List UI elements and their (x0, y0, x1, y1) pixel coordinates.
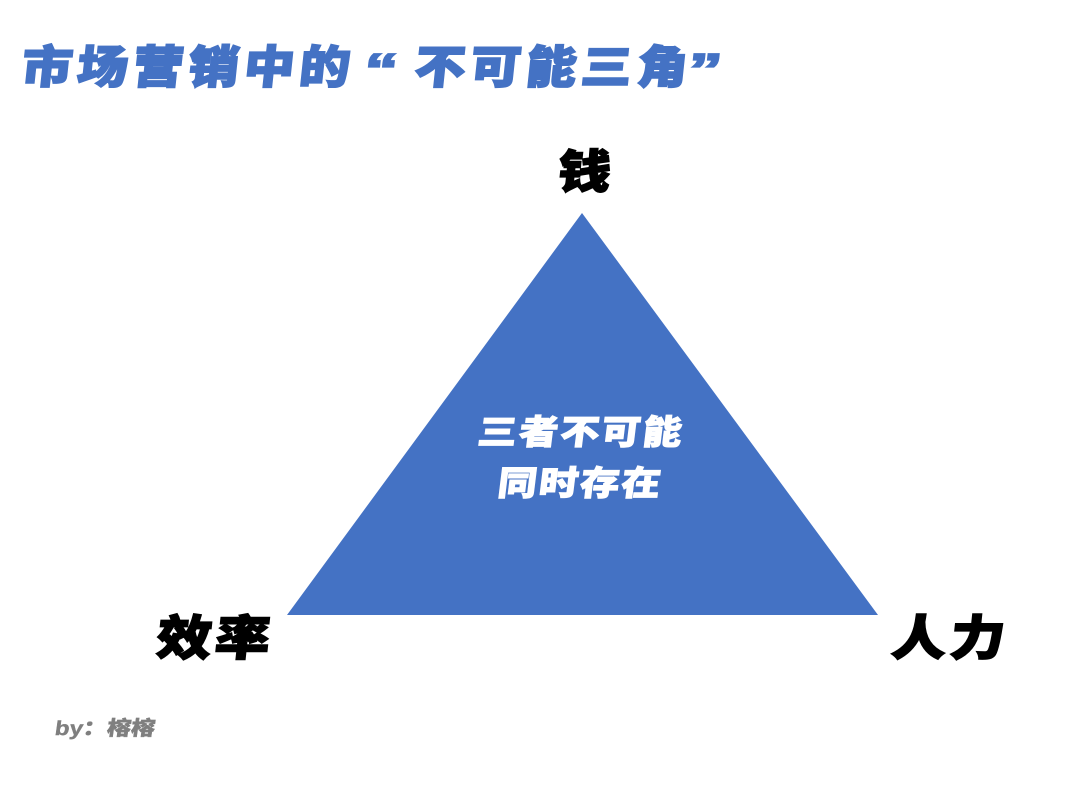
title: ” (685, 44, 724, 95)
title (19, 42, 724, 95)
title: 不可能三角 (412, 42, 695, 93)
triangle caption: 三者不可能 (476, 414, 686, 452)
label: efficiency: 效率 (154, 613, 276, 666)
byline: by：榕榕 (53, 718, 157, 740)
title: “ (361, 44, 400, 95)
title: 市场营销中的 (19, 42, 358, 93)
label: money: 钱 (555, 146, 614, 198)
triangle caption: 同时存在 (496, 465, 665, 503)
triangle caption (476, 414, 686, 503)
label: manpower: 人力 (889, 613, 1011, 666)
